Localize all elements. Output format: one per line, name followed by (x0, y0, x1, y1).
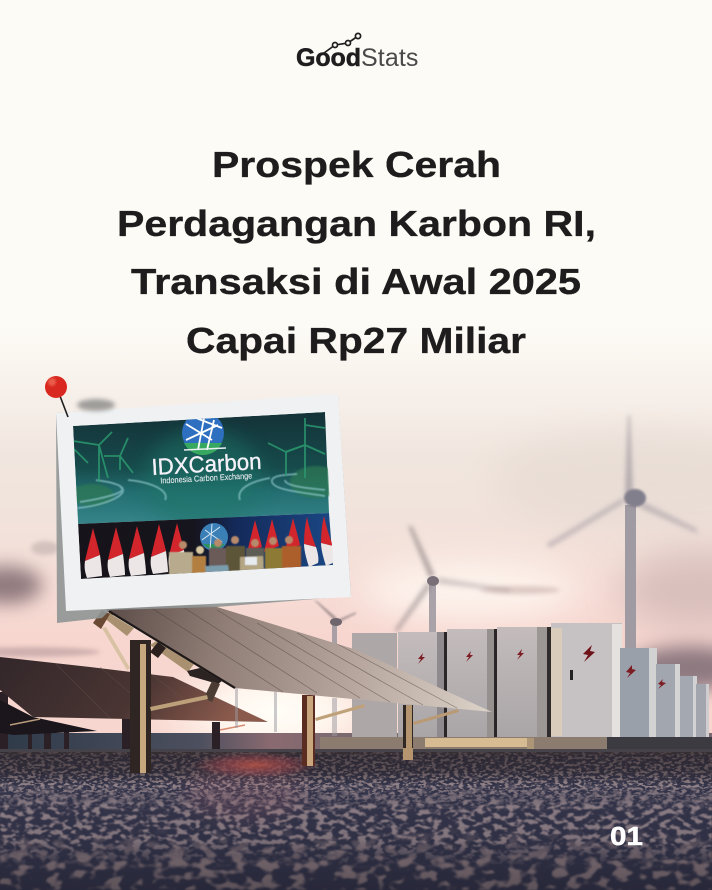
push pin (45, 376, 115, 417)
people (169, 546, 301, 579)
sky clouds and sun glow (0, 430, 712, 774)
screen backdrop (73, 412, 329, 524)
battery storage cabinets (320, 623, 712, 750)
window bars behind panel (235, 688, 337, 736)
cabinet 9 (696, 684, 709, 738)
title (117, 144, 596, 361)
hills (70, 466, 342, 506)
cabinet 8 (680, 676, 697, 738)
heads (179, 536, 293, 554)
cabinet 5 (551, 623, 622, 737)
chart line icon (324, 33, 361, 53)
row of flags (85, 516, 335, 578)
GoodStats logo: Stats (361, 44, 418, 72)
wind turbine: small (314, 600, 356, 645)
far dark solar panels (0, 657, 268, 760)
gravel ground (0, 749, 712, 890)
stage backdrop (78, 513, 333, 579)
card paper (56, 394, 351, 611)
far panel posts (0, 692, 220, 760)
sun flare on gravel (193, 752, 317, 778)
panel rail (103, 610, 235, 688)
stone layers (0, 752, 712, 810)
support posts (130, 640, 413, 773)
cabinet 1 (352, 633, 397, 738)
pin needle (60, 396, 68, 417)
foreground solar panel (93, 605, 492, 748)
GoodStats logo (296, 33, 418, 72)
panel seams (150, 607, 457, 708)
title: Transaksi di Awal 2025 (131, 261, 581, 302)
base colour (0, 755, 712, 890)
pin shadow (77, 399, 115, 411)
title: Capai Rp27 Miliar (186, 320, 526, 361)
green glow (144, 429, 262, 520)
podiums (205, 565, 229, 573)
dignitaries at podium (169, 536, 301, 579)
title: Prospek Cerah (212, 144, 501, 185)
cabinet base rail (320, 737, 712, 750)
path strip (0, 749, 712, 757)
cabinet 6 (620, 648, 657, 737)
wind turbine: middle (394, 526, 510, 634)
wind turbine: large (546, 415, 698, 653)
IDXCarbon screen text: Indonesia Carbon Exchange (160, 470, 253, 486)
lightning bolts (418, 645, 666, 689)
IDXCarbon screen text (153, 454, 261, 484)
panel surface (107, 600, 492, 712)
cabinet 7 (656, 664, 680, 738)
depth shading (0, 752, 712, 890)
IDXCarbon screen text: IDXCarbon (151, 448, 262, 480)
brackets and arms (93, 610, 459, 725)
title: Perdagangan Karbon RI, (117, 203, 596, 244)
dark panel surface (0, 657, 268, 722)
polaroid card (56, 394, 351, 623)
post feet overlapping ground (130, 748, 413, 773)
stage globe (200, 523, 228, 551)
cabinet 4 (497, 627, 551, 737)
cabinet 3 (447, 629, 497, 737)
turbines on screen (73, 418, 325, 482)
wordmark: Good (296, 44, 361, 72)
cabinet 2 (398, 632, 447, 737)
IDX globe logo (182, 418, 226, 455)
curved roads (78, 474, 325, 508)
pin head (45, 376, 67, 398)
horizon sea band (0, 733, 712, 751)
event photo (70, 412, 342, 579)
card shadow (56, 396, 351, 623)
page number: 01 (610, 821, 643, 851)
